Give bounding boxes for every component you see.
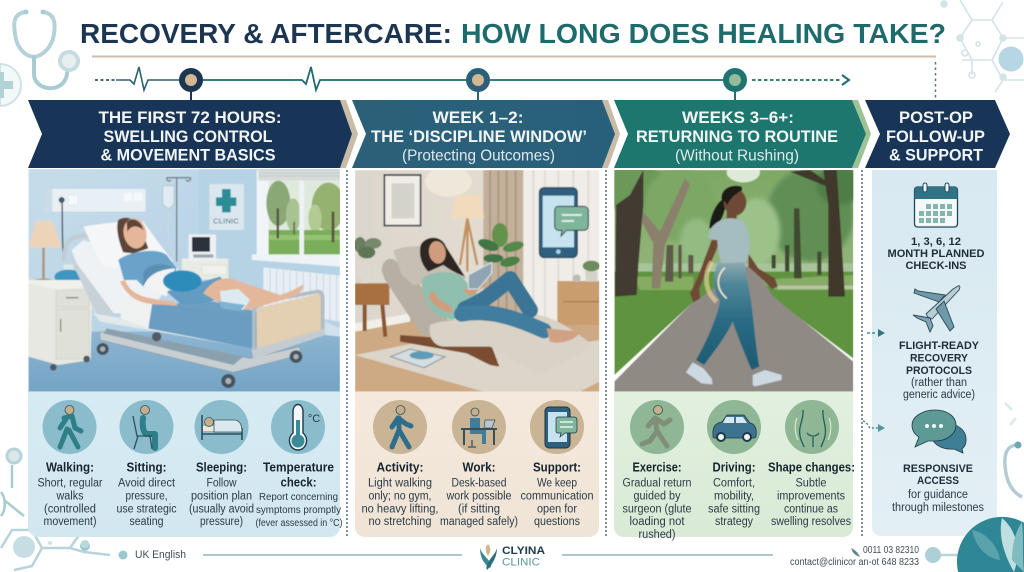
text: walking: Short, regular	[38, 478, 103, 490]
phone with chat bubble	[539, 188, 577, 258]
icon: thermometer	[271, 400, 325, 454]
text: work	[440, 460, 518, 528]
clinic sign	[209, 184, 244, 230]
floor lamp	[451, 194, 484, 218]
text: exercise: rushed)	[638, 529, 676, 541]
text: activity: no heavy lifting,	[362, 504, 438, 516]
legs	[696, 262, 759, 370]
panel: weeks 3-6 cards	[614, 390, 853, 537]
text: temperature check: (fever assessed in °C)	[256, 518, 342, 529]
lamp	[28, 221, 61, 248]
banner: post-op follow-up: & SUPPORT	[889, 146, 984, 164]
woman	[420, 238, 465, 277]
panel: first 72 hours cards	[28, 390, 340, 537]
text: shape changes: improvements	[777, 490, 845, 502]
banner: the first 72 hours	[28, 100, 358, 168]
title: RECOVERY & AFTERCARE:	[80, 18, 452, 49]
text: shape changes: continue as	[784, 504, 838, 516]
text: driving: mobility,	[714, 490, 754, 502]
banner: weeks 3-6+: WEEKS 3–6+:	[682, 108, 794, 127]
text: exercise: guided by	[634, 490, 681, 502]
text: sleeping: Sleeping:	[196, 460, 247, 474]
text: support	[520, 460, 594, 528]
icon: desk work	[452, 400, 506, 454]
text: activity: no stretching	[368, 516, 432, 528]
text: sitting: Avoid direct	[118, 478, 176, 490]
plant	[492, 223, 508, 247]
title: HOW LONG DOES HEALING TAKE?	[461, 18, 946, 49]
text: temperature check	[256, 460, 342, 529]
title	[80, 18, 946, 49]
text: activity: Activity:	[376, 460, 424, 474]
arrow: to responsive access	[863, 421, 885, 432]
text: work: (if sitting	[458, 504, 500, 516]
trees	[615, 170, 643, 297]
nightstand	[28, 280, 93, 365]
text: responsive access: ACCESS	[917, 475, 959, 487]
decoration: molecule network top right	[941, 0, 1024, 92]
patient	[117, 218, 148, 253]
text: shape changes: swelling resolves	[771, 516, 851, 528]
radiator	[263, 267, 340, 322]
glute highlight glow	[706, 262, 717, 302]
window	[257, 170, 340, 260]
footer: contact details	[790, 545, 919, 568]
icon: body shape	[785, 400, 839, 454]
decoration: teal leaf globe	[925, 517, 1024, 572]
panel: post-op support	[872, 170, 997, 536]
text: check-ins: MONTH PLANNED	[888, 248, 985, 260]
icon: sleeping	[194, 400, 248, 454]
illustration: woman walking on park path	[614, 170, 854, 392]
arms	[690, 240, 720, 302]
banner: weeks 3-6+: RETURNING TO ROUTINE	[636, 127, 838, 146]
right cabinet	[557, 281, 599, 325]
text: check-ins	[888, 236, 985, 272]
text: flight-ready protocols: generic advice)	[903, 389, 975, 401]
banner: weeks 3-6+	[614, 100, 871, 168]
head rail and backrest	[64, 236, 88, 262]
text: shape changes	[768, 460, 855, 528]
text: support: communication	[520, 490, 594, 502]
text: flight-ready protocols: FLIGHT-READY	[899, 340, 980, 352]
lounge chair	[400, 335, 499, 367]
shoes	[686, 362, 713, 384]
text: activity: only; no gym,	[368, 490, 432, 502]
illustration: patient resting in clinic bed	[28, 169, 345, 392]
text: exercise: surgeon (glute	[622, 504, 692, 516]
icon: support phone	[530, 400, 584, 454]
icon: airplane	[913, 286, 960, 332]
mattress	[162, 301, 257, 348]
footboard	[257, 293, 323, 348]
text: responsive access: RESPONSIVE	[903, 463, 973, 475]
framed picture	[384, 175, 421, 226]
text: temperature check: Report concerning	[259, 492, 338, 503]
monitor and side table	[182, 258, 228, 280]
icon: activity	[373, 400, 427, 454]
text: driving	[708, 460, 760, 528]
text: shape changes: Shape changes:	[768, 460, 855, 474]
text: temperature check: check:	[280, 476, 316, 490]
text: responsive access: through milestones	[892, 502, 984, 514]
text: check-ins: 1, 3, 6, 12	[911, 236, 961, 248]
text: flight-ready protocols: PROTOCOLS	[906, 365, 972, 377]
text: support: Support:	[533, 460, 581, 474]
banner: the first 72 hours: & MOVEMENT BASICS	[100, 146, 276, 164]
banner: post-op follow-up: POST-OP	[899, 108, 973, 127]
text: sleeping: Follow	[206, 478, 237, 490]
text: walking: (controlled	[44, 504, 96, 516]
text: exercise: Gradual return	[622, 478, 692, 490]
text: sleeping: pressure)	[200, 516, 243, 528]
text: driving: Comfort,	[713, 478, 755, 490]
path	[614, 267, 853, 392]
text: driving: strategy	[715, 516, 753, 528]
decoration: stethoscope bottom right	[1005, 403, 1022, 497]
text: sleeping: (usually avoid	[189, 504, 254, 516]
text: flight-ready protocols: RECOVERY	[910, 352, 969, 364]
text: exercise: loading not	[630, 516, 685, 528]
text: sitting: Sitting:	[126, 460, 166, 474]
decoration: medical cross badge	[0, 64, 21, 106]
IV pole	[167, 178, 191, 262]
decoration: stethoscope top left	[14, 10, 78, 88]
arrow: to flight-ready	[867, 329, 885, 337]
text: driving: safe sitting	[708, 504, 760, 516]
logo: CLINIC	[502, 556, 540, 568]
text: support: open for	[537, 504, 577, 516]
text: activity: Light walking	[368, 478, 432, 490]
text: sitting: use strategic	[116, 504, 177, 516]
text: support: questions	[534, 516, 580, 528]
left table and vase	[355, 283, 389, 305]
text: temperature check: symptoms promptly	[256, 505, 341, 516]
text: flight-ready protocols: (rather than	[911, 377, 967, 389]
timeline with three milestones	[95, 67, 849, 100]
top	[708, 218, 750, 263]
logo: CLYINA	[502, 545, 545, 557]
text: shape changes: Subtle	[796, 478, 826, 490]
bed frame	[100, 332, 300, 372]
icon: chat bubbles	[912, 410, 966, 453]
text: walking: walks	[56, 490, 84, 502]
illustration: reclining at home with tablet	[354, 167, 600, 392]
icon: sitting	[120, 400, 174, 454]
illustration: patient resting in clinic bed: CLINIC	[213, 216, 239, 225]
text: sitting: seating	[130, 516, 164, 528]
woman: hair and head	[709, 186, 742, 228]
text: walking	[38, 460, 103, 528]
banner: post-op follow-up: FOLLOW-UP	[886, 127, 985, 146]
logo	[480, 544, 545, 570]
text: check-ins: CHECK-INS	[906, 260, 966, 272]
pillow	[83, 221, 174, 262]
banner: week 1-2: (Protecting Outcomes)	[402, 148, 555, 164]
banner: week 1-2	[352, 100, 620, 168]
text: work: managed safely)	[440, 516, 518, 528]
text: exercise: Exercise:	[632, 460, 682, 474]
text: walking: Walking:	[46, 460, 94, 474]
text: sleeping: position plan	[191, 490, 252, 502]
banner: weeks 3-6+: (Without Rushing)	[675, 148, 799, 164]
text: work: work possible	[446, 490, 512, 502]
icon: walking	[42, 400, 96, 454]
footer: contact details: 0011 03 82310	[863, 545, 919, 556]
text: flight-ready protocols	[899, 340, 980, 401]
text: driving: Driving:	[712, 460, 756, 474]
text: work: Work:	[462, 460, 496, 474]
banner: week 1-2: THE ‘DISCIPLINE WINDOW’	[371, 127, 587, 146]
banner: the first 72 hours: THE FIRST 72 HOURS:	[98, 108, 282, 127]
icon: thermometer: °C	[308, 413, 320, 425]
grass	[614, 272, 743, 375]
decoration: molecule network bottom left	[1, 449, 128, 570]
icon: calendar	[914, 183, 958, 227]
text: responsive access	[892, 463, 984, 514]
icon: exercise	[630, 400, 684, 454]
icon: car	[707, 400, 761, 454]
footer: language label: UK English	[135, 549, 186, 561]
banner: week 1-2: WEEK 1–2:	[432, 108, 524, 127]
panel: week 1-2 cards	[355, 390, 599, 537]
text: support: We keep	[537, 478, 577, 490]
text: work: Desk-based	[452, 478, 506, 490]
banner: post-op follow-up	[865, 100, 1010, 168]
text: sleeping	[189, 460, 254, 528]
text: sitting: pressure,	[126, 490, 168, 502]
text: exercise	[622, 460, 692, 541]
text: walking: movement)	[44, 516, 97, 528]
text: sitting	[116, 460, 177, 528]
text: temperature check: Temperature	[263, 460, 334, 474]
footer: contact details: contact@clinicor an-ot 648 8233	[790, 557, 919, 568]
banner: the first 72 hours: SWELLING CONTROL	[104, 127, 272, 146]
ice pack on stand	[54, 269, 80, 280]
book and pouch	[391, 349, 445, 368]
text: activity	[362, 460, 438, 528]
text: responsive access: for guidance	[908, 489, 968, 501]
